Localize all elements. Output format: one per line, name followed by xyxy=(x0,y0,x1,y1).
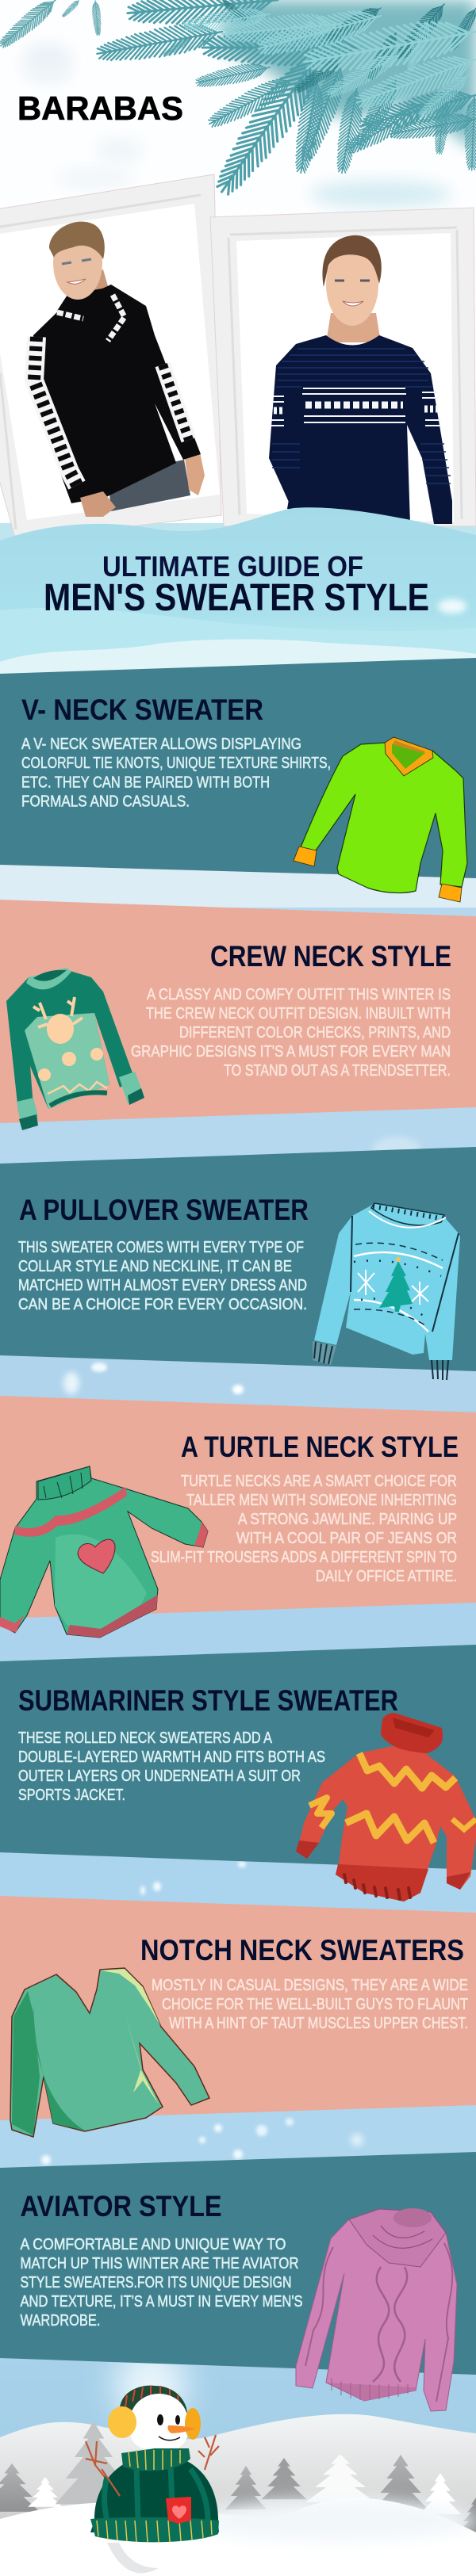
left man: head xyxy=(53,227,102,300)
description: COLORFUL TIE KNOTS, UNIQUE TEXTURE SHIRTS, xyxy=(21,755,331,772)
snowy landscape xyxy=(0,2414,476,2576)
description: WARDROBE. xyxy=(21,2312,100,2329)
left man: right hand xyxy=(185,452,205,495)
description xyxy=(21,2236,303,2329)
jeans xyxy=(108,460,190,511)
description xyxy=(152,1977,468,2032)
description xyxy=(18,1729,325,1804)
pocket heart xyxy=(172,2505,186,2519)
left sleeve key pattern xyxy=(34,337,77,485)
photo frame: left man in black shawl-collar sweater xyxy=(0,174,225,541)
eyes xyxy=(157,2414,163,2425)
right sleeve key pattern xyxy=(163,365,189,440)
description: SPORTS JACKET. xyxy=(18,1787,125,1804)
chest key stripes xyxy=(271,388,441,426)
description: ETC. THEY CAN BE PAIRED WITH BOTH xyxy=(21,774,270,791)
pocket xyxy=(166,2497,191,2524)
panel: V-neck sweater xyxy=(0,658,476,878)
sleeve ribbing xyxy=(272,349,451,483)
panel: submariner style sweater xyxy=(0,1645,476,1870)
sweater hem xyxy=(90,2517,219,2542)
description: CAN BE A CHOICE FOR EVERY OCCASION. xyxy=(18,1296,307,1313)
photo frame: right man in navy crew neck sweater xyxy=(210,208,476,526)
description xyxy=(151,1473,457,1585)
panel: crew neck style xyxy=(0,900,476,1123)
left man: hair xyxy=(49,222,105,259)
logo: BARABAS: BARABAS xyxy=(17,90,183,127)
description: A COMFORTABLE AND UNIQUE WAY TO xyxy=(21,2236,286,2253)
left man: eyes and smile xyxy=(62,259,91,264)
twigs xyxy=(86,2435,219,2496)
description: AND TEXTURE, IT'S A MUST IN EVERY MEN'S xyxy=(21,2293,303,2310)
left man: hand xyxy=(80,491,116,517)
twig over sweater xyxy=(102,2469,120,2496)
description: STYLE SWEATERS.FOR ITS UNIQUE DESIGN xyxy=(21,2274,292,2291)
description: THIS SWEATER COMES WITH EVERY TYPE OF xyxy=(18,1239,304,1256)
nose xyxy=(168,2425,196,2433)
right man: hair xyxy=(323,235,382,287)
right man: head xyxy=(326,243,378,326)
title: ULTIMATE GUIDE OF xyxy=(102,550,363,583)
description: MATCHED WITH ALMOST EVERY DRESS AND xyxy=(18,1277,307,1294)
description: COLLAR STYLE AND NECKLINE, IT CAN BE xyxy=(18,1258,292,1275)
description: A V- NECK SWEATER ALLOWS DISPLAYING xyxy=(21,736,301,753)
heading: SUBMARINER STYLE SWEATER xyxy=(18,1684,398,1717)
description xyxy=(18,1239,307,1313)
icon: green turtle neck sweater with heart xyxy=(0,1466,208,1638)
snowman body shadow xyxy=(107,2543,159,2573)
head xyxy=(129,2394,189,2452)
panel: pullover sweater xyxy=(0,1147,476,1371)
icon: teal crew neck sweater with reindeer xyxy=(6,968,144,1130)
description: THESE ROLLED NECK SWEATERS ADD A xyxy=(18,1729,273,1747)
description: MATCH UP THIS WINTER ARE THE AVIATOR xyxy=(21,2255,298,2272)
icon: red rolled neck sweater xyxy=(296,1713,476,1901)
icon: green notch neck sweater xyxy=(10,1968,209,2137)
smile xyxy=(159,2436,180,2440)
right man: neck xyxy=(326,313,381,342)
description: FORMALS AND CASUALS. xyxy=(21,793,190,810)
description xyxy=(131,986,451,1080)
earmuffs xyxy=(108,2406,136,2438)
panel: aviator style xyxy=(0,2152,476,2375)
fir branches xyxy=(0,0,476,202)
snow title band xyxy=(0,507,476,682)
snow hills xyxy=(0,2498,476,2576)
icon: snowman in green sweater xyxy=(86,2386,219,2573)
icon: green V-neck sweater xyxy=(294,737,467,902)
panel: notch neck sweaters xyxy=(0,1896,476,2120)
heading: A PULLOVER SWEATER xyxy=(19,1194,309,1226)
collar xyxy=(57,287,127,342)
icon: blue pullover sweater xyxy=(313,1203,460,1380)
right man: eyes and smile xyxy=(335,279,370,282)
neck scarf xyxy=(121,2448,190,2471)
left man: neck xyxy=(67,269,111,305)
hat xyxy=(120,2386,187,2413)
sweater dome xyxy=(90,2454,219,2532)
description xyxy=(21,736,331,810)
panel: turtle neck style xyxy=(0,1396,476,1619)
title xyxy=(44,550,429,619)
description: OUTER LAYERS OR UNDERNEATH A SUIT OR xyxy=(18,1768,301,1785)
right man: sweater xyxy=(269,335,452,524)
heading: AVIATOR STYLE xyxy=(21,2190,222,2222)
left man: sweater xyxy=(27,285,201,503)
description: DOUBLE-LAYERED WARMTH AND FITS BOTH AS xyxy=(18,1749,325,1766)
heading: V- NECK SWEATER xyxy=(21,694,263,726)
icon: pink cable knit sweater xyxy=(296,2208,457,2411)
